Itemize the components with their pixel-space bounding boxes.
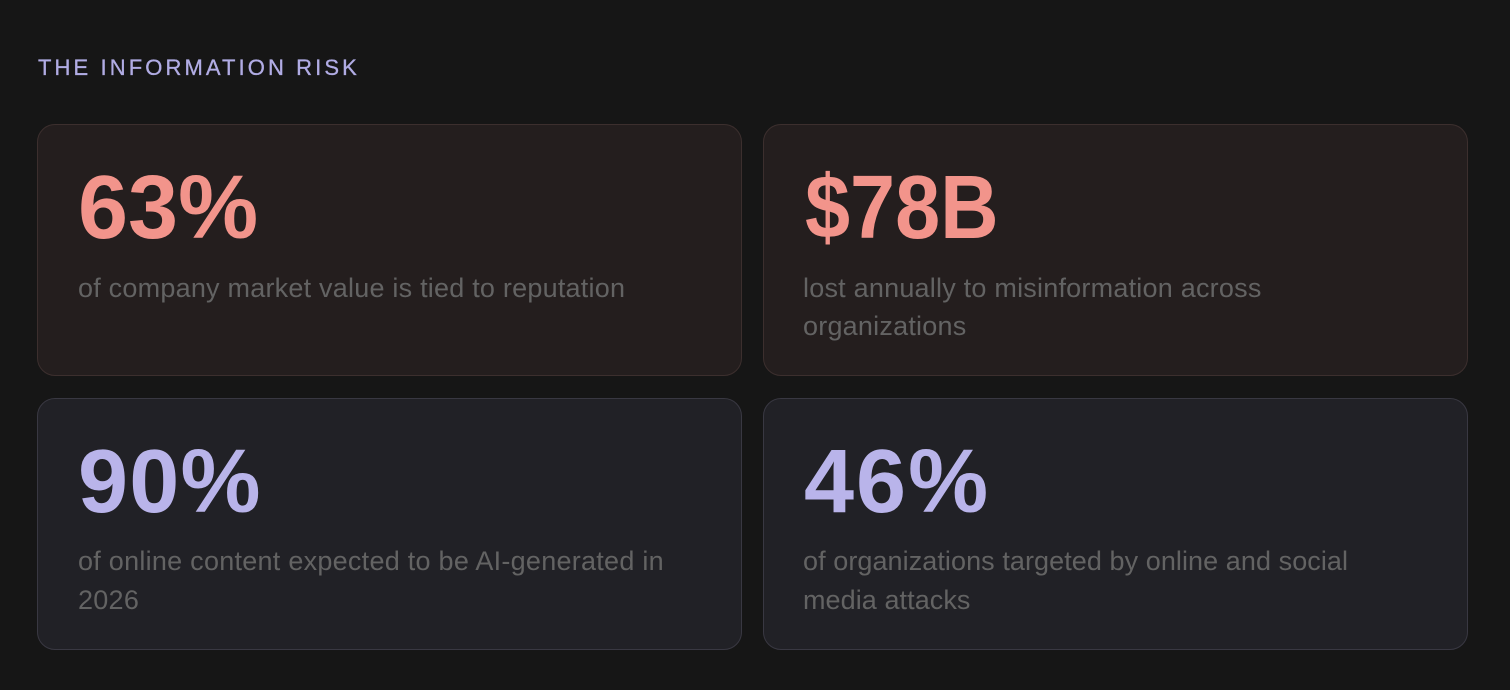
stat description: market value: of company market value is tied to reputation (78, 273, 625, 303)
stat number: 46%: 46% (804, 432, 990, 532)
panel: 46% stat card (763, 398, 1468, 650)
stat description: targeted organizations: of organizations targeted by online and social (803, 546, 1348, 576)
stat description: AI-generated content: 2026 (78, 584, 139, 614)
heading: the information risk: THE INFORMATION RISK (38, 55, 360, 80)
stat description: targeted organizations: media attacks (803, 584, 970, 614)
panel: 90% stat card (37, 398, 742, 650)
stat description: misinformation losses (803, 273, 1262, 341)
panel: $78B stat card (763, 124, 1468, 376)
stat number: $78B: $78B (805, 158, 999, 258)
stat description: AI-generated content: of online content expected to be AI-generated in (78, 546, 664, 576)
stat number: 63%: 63% (78, 158, 258, 258)
stat number: 90%: 90% (78, 432, 262, 532)
stat description: misinformation losses: lost annually to misinformation across (803, 273, 1262, 303)
stat description: targeted organizations (803, 546, 1348, 614)
panel: 63% stat card (37, 124, 742, 376)
stat description: misinformation losses: organizations (803, 311, 966, 341)
stat description: AI-generated content (78, 546, 664, 614)
